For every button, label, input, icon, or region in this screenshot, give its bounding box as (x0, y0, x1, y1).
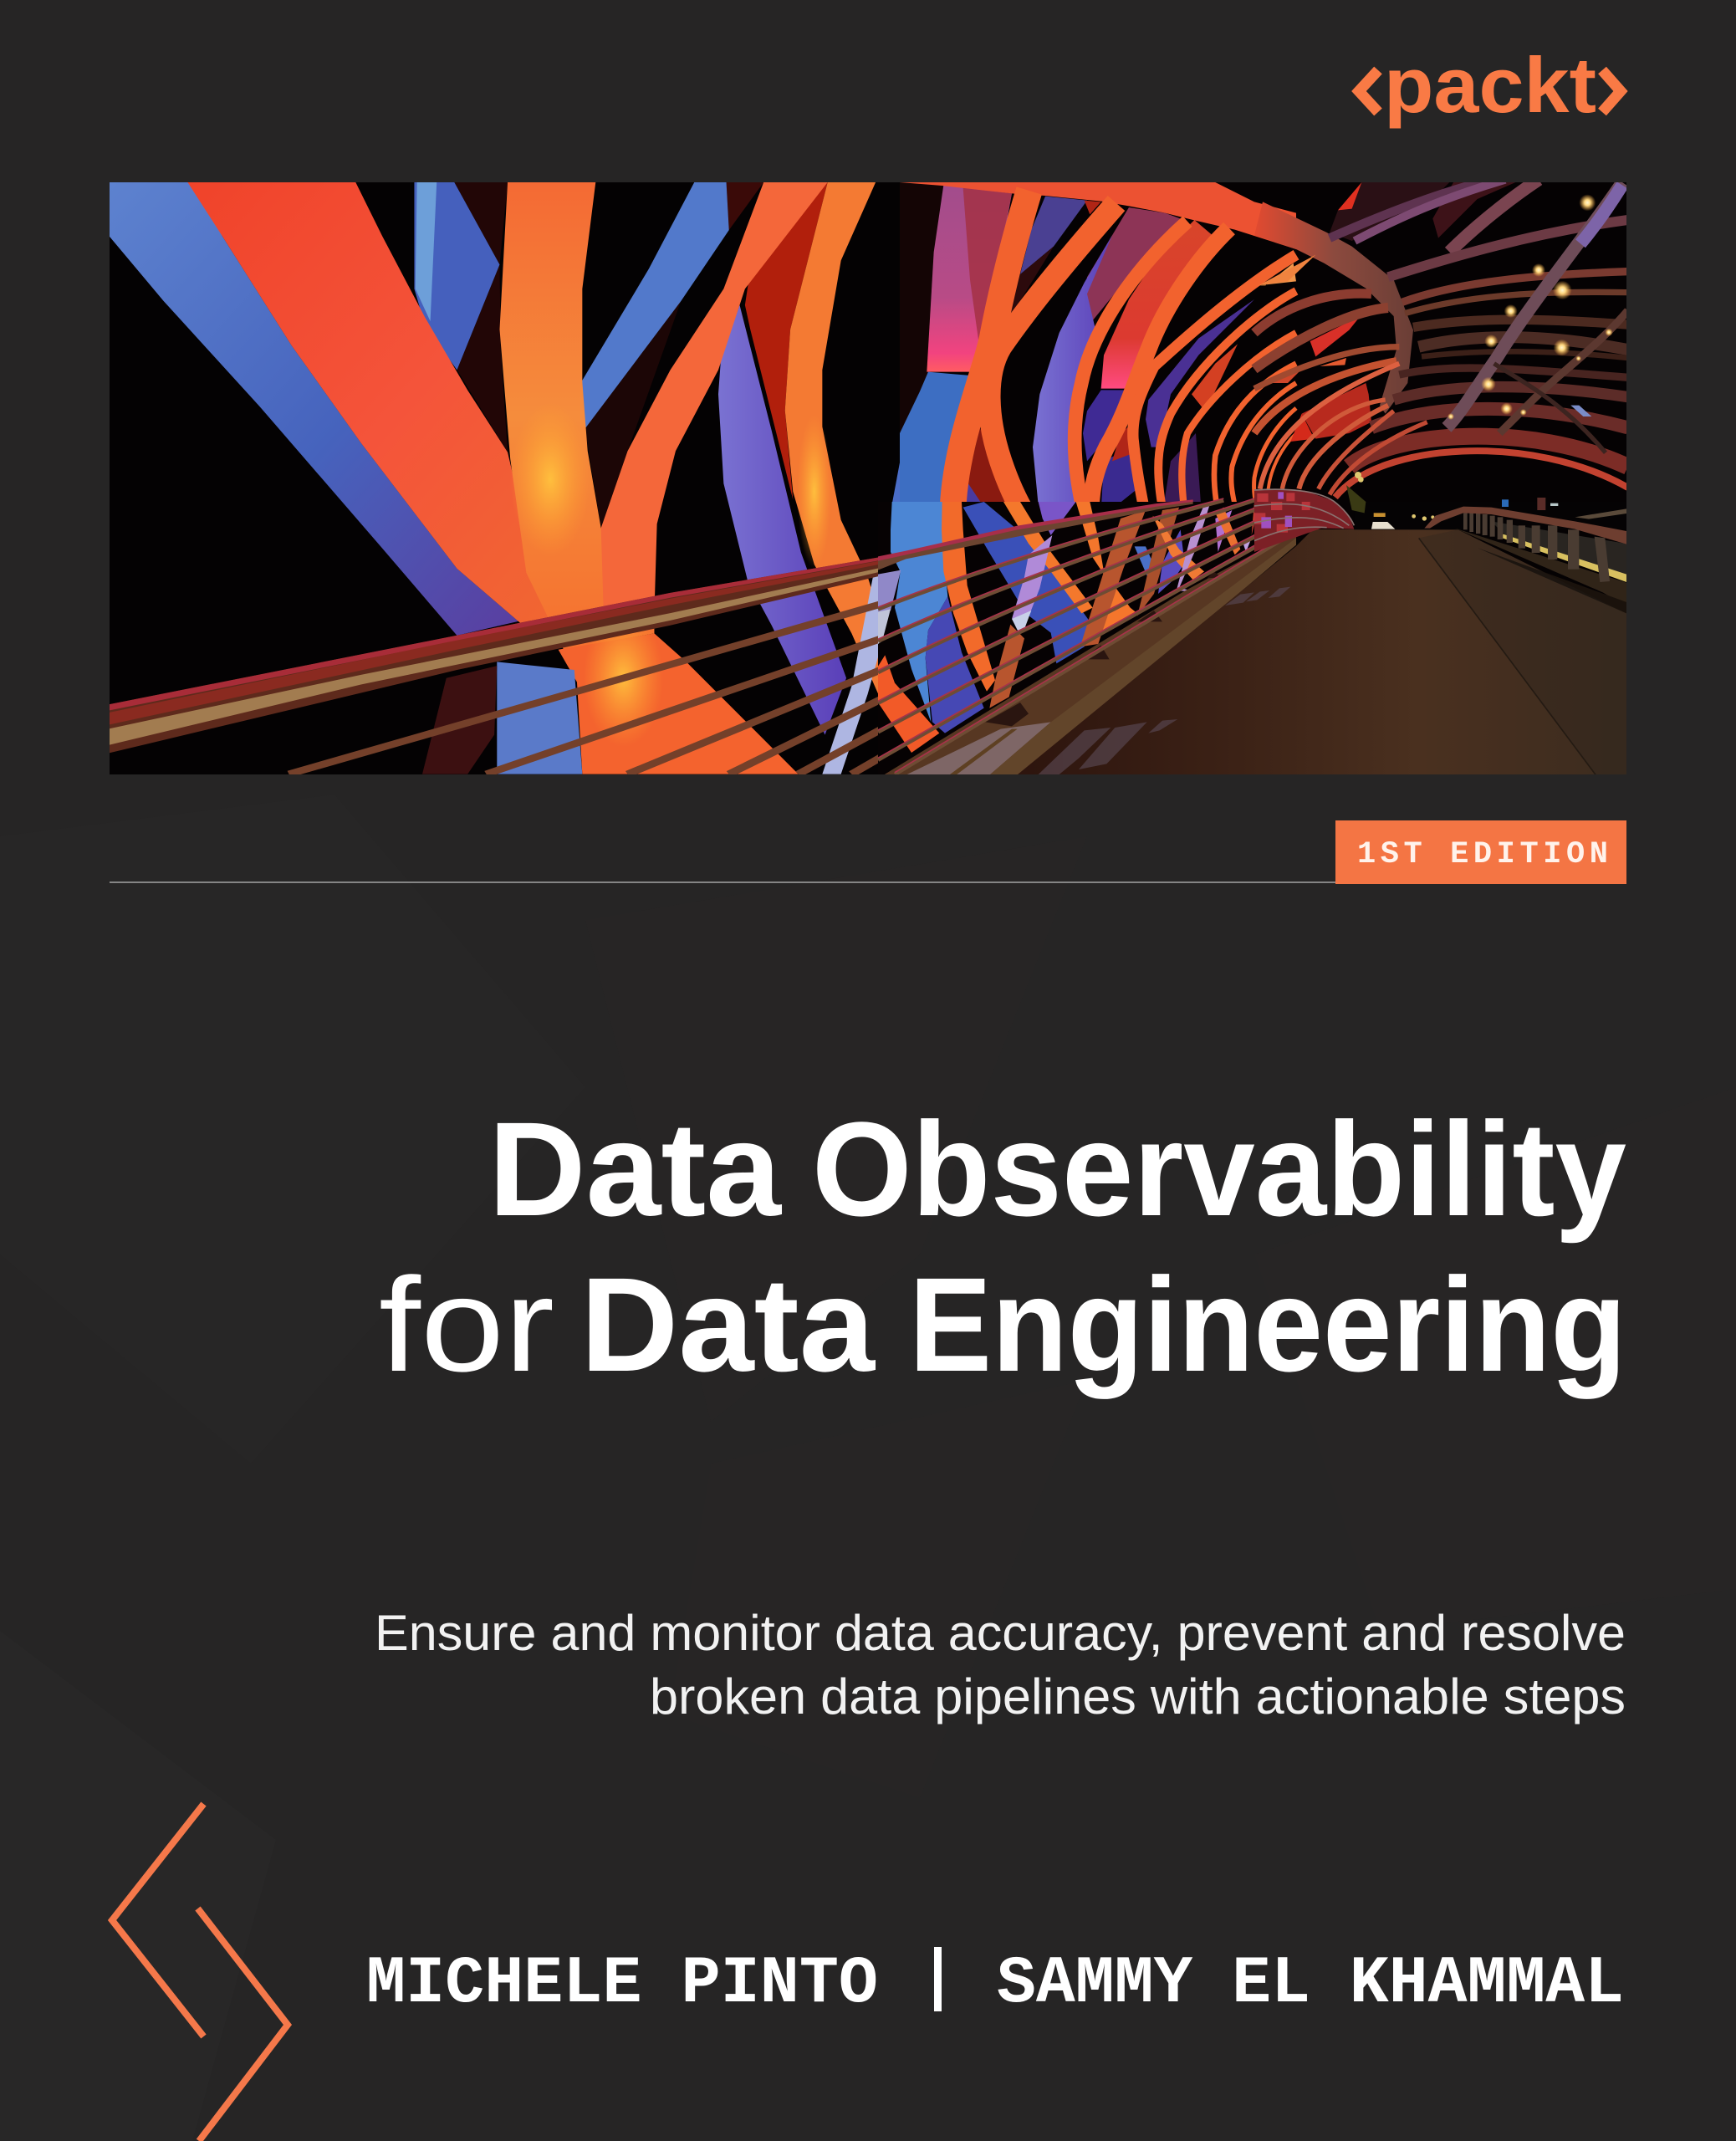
road surface (1018, 529, 1626, 774)
ceiling (1254, 180, 1628, 498)
left rails (288, 600, 878, 774)
authors: SAMMY EL KHAMMAL (997, 1946, 1624, 2022)
title: Engineering (909, 1249, 1626, 1399)
panels behind arches (900, 182, 943, 433)
near mesh dome (1254, 489, 1354, 552)
title: Observability (812, 1094, 1626, 1244)
title: Data (580, 1249, 876, 1399)
road markings (1039, 587, 1290, 774)
far carriageway (1495, 522, 1626, 574)
title: for (379, 1249, 554, 1399)
road seam (1419, 538, 1596, 775)
tunnel exit, far rail and pavement (1254, 472, 1626, 775)
edition badge (1335, 820, 1626, 884)
subtitle: broken data pipelines with actionable steps (650, 1668, 1626, 1725)
left photo area: lit beams (110, 182, 920, 774)
subtitle: Ensure and monitor data accuracy, prevent and resolve (375, 1605, 1626, 1661)
top band (900, 182, 1296, 249)
railing section with slats (878, 502, 1296, 775)
cover photo: illuminated bridge (110, 180, 1628, 775)
arches (952, 191, 1296, 525)
left handrail (110, 550, 920, 753)
title (379, 1094, 1626, 1399)
edition badge: 1ST EDITION (1357, 837, 1608, 872)
background facets (0, 795, 1736, 2141)
divider line (110, 881, 1339, 883)
authors (366, 1946, 1624, 2022)
curb and pads (884, 531, 1296, 775)
railing bars (878, 498, 1296, 774)
title: Data (488, 1094, 782, 1244)
logo: packt: packt (1384, 41, 1596, 129)
right photo area: arches and ceiling (900, 182, 1626, 502)
ceiling lights (1448, 194, 1613, 420)
authors: MICHELE PINTO (366, 1946, 878, 2022)
icon: chevron mark (112, 1804, 288, 2141)
subtitle (375, 1605, 1626, 1725)
